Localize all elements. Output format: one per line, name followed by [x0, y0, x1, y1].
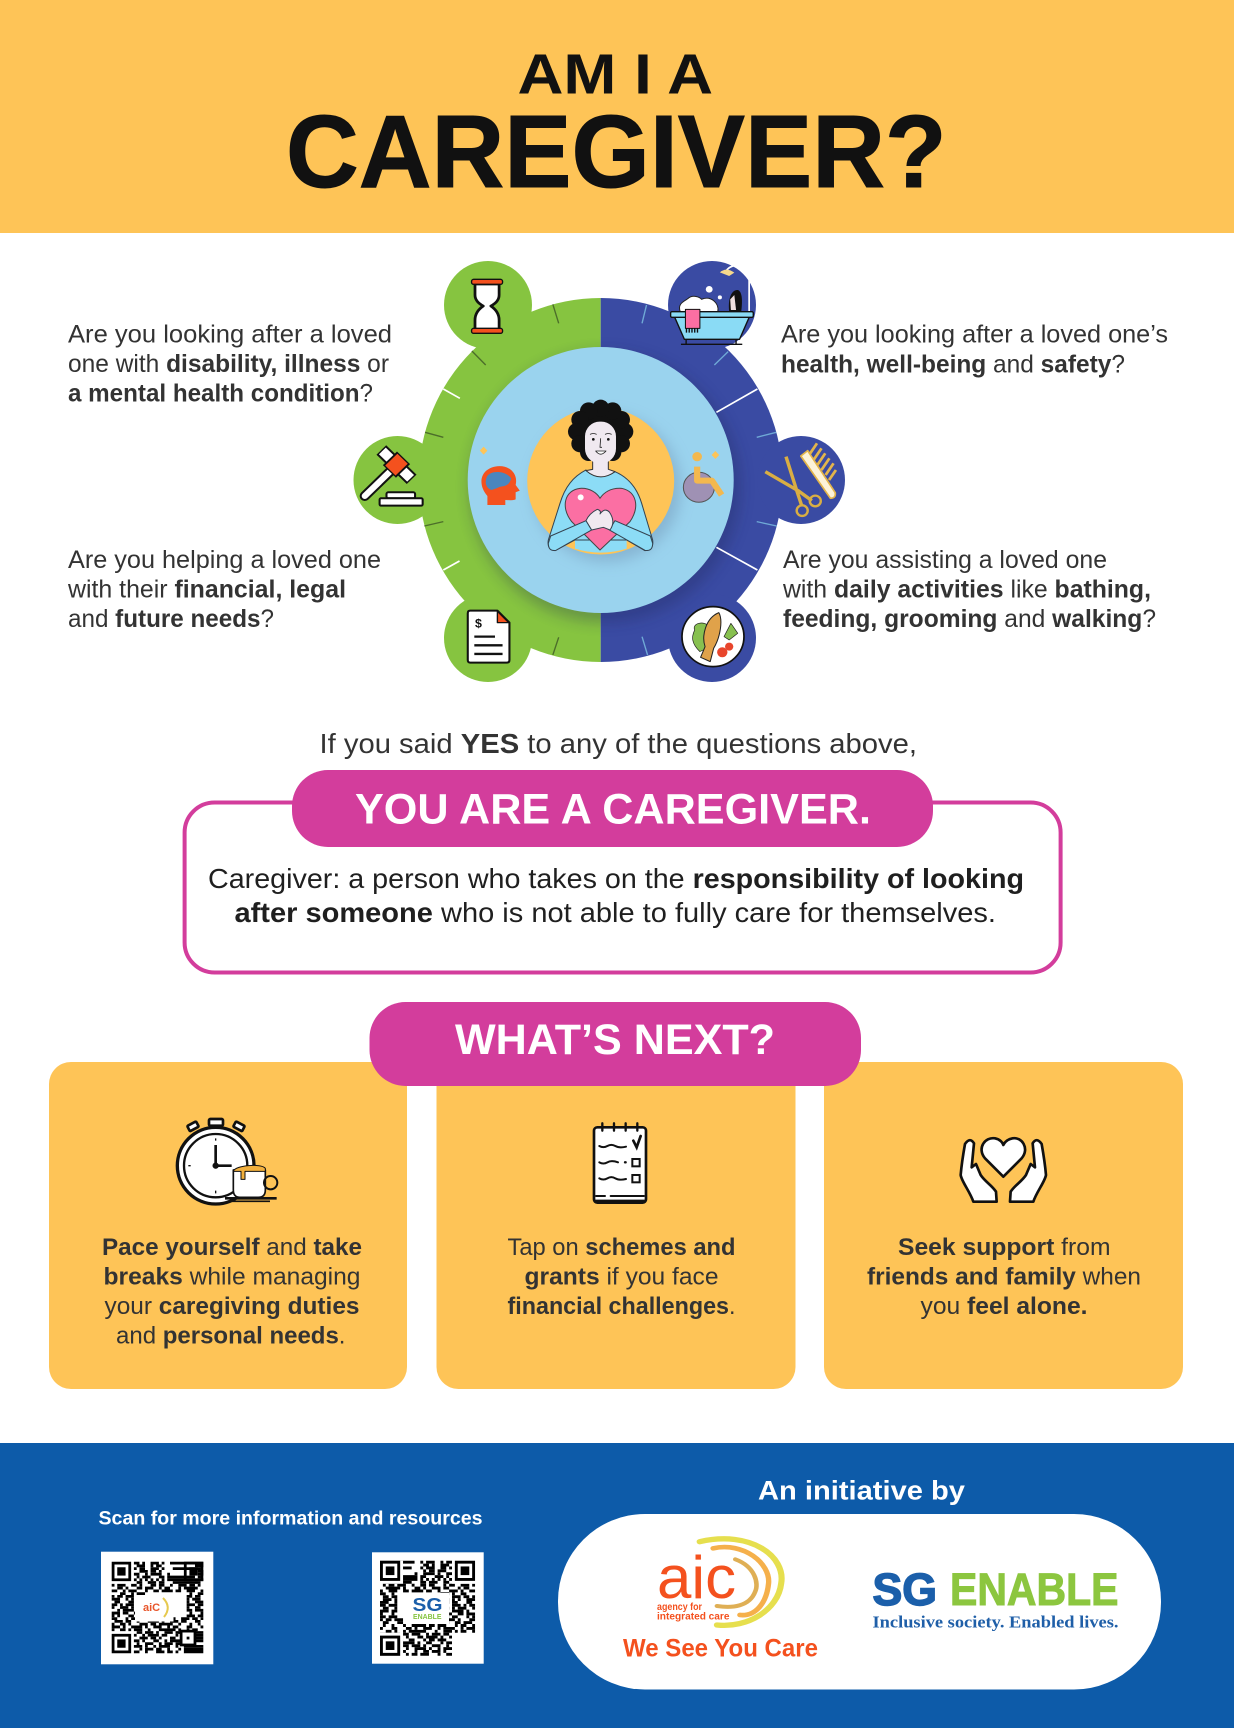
icon: stopwatch and coffee: [177, 1119, 277, 1204]
header band with title: [0, 0, 1234, 233]
tick marks: [424, 304, 777, 655]
card text: friends and family when: [867, 1264, 1141, 1290]
definition text: Caregiver: a person who takes on the responsibility of looking: [208, 863, 1024, 894]
icon: scissors and comb: [765, 443, 836, 516]
logo panel: [558, 1514, 1161, 1690]
logo: AIC: We See You Care: [623, 1634, 818, 1662]
card text: [867, 1234, 1141, 1320]
card: seek support: [824, 1062, 1183, 1389]
pill heading: [292, 770, 933, 847]
question: daily activities: feeding, grooming and walking?: [783, 605, 1156, 633]
logo: SG Enable: [872, 1564, 1118, 1632]
QR code: SG Enable: [372, 1552, 484, 1664]
inner light blue disc: [468, 347, 734, 613]
card text: Pace yourself and take: [102, 1234, 362, 1261]
icon: sparkle right: [712, 451, 719, 459]
QR code: AIC: aiC: [143, 1602, 160, 1614]
icon: bath tub: [671, 265, 753, 344]
yellow disc: [527, 408, 674, 554]
icon: hourglass: [472, 279, 503, 333]
pill heading: what's next: [370, 1002, 861, 1086]
logo: SG Enable: SG: [872, 1564, 937, 1615]
question: health, well-being and safety: Are you looking after a loved one’s: [781, 320, 1168, 348]
pill heading: what's next: WHAT’S NEXT?: [455, 1016, 775, 1064]
icon: sparkle left: [480, 447, 487, 455]
central care wheel: [354, 261, 845, 682]
card text: Seek support from: [898, 1234, 1110, 1261]
logo: AIC: aic: [657, 1544, 736, 1611]
definition text: [208, 863, 1024, 928]
question: disability, illness or mental health: a mental health condition?: [68, 380, 373, 408]
card text: grants if you face: [524, 1264, 718, 1290]
icon: notebook checklist: [594, 1123, 646, 1203]
icon: gavel: [365, 450, 423, 506]
card text: Tap on schemes and: [508, 1234, 736, 1261]
question: daily activities: [782, 546, 1156, 633]
definition text: after someone who is not able to fully care for themselves.: [234, 897, 996, 928]
figure: caregiver hugging heart: [548, 400, 653, 553]
logo: SG Enable: Inclusive society. Enabled lives.: [872, 1612, 1118, 1632]
logo: AIC: integrated care: [657, 1612, 730, 1622]
card text: breaks while managing: [104, 1264, 360, 1290]
card: schemes and grants: [436, 1062, 796, 1389]
logo: AIC: [623, 1539, 818, 1662]
question: financial, legal and future needs: and future needs?: [68, 605, 274, 633]
question: health, well-being and safety: [781, 320, 1168, 378]
icon: wheelchair: [683, 452, 722, 502]
heading: an initiative by: An initiative by: [758, 1476, 965, 1506]
QR code: SG Enable: ENABLE: [413, 1614, 442, 1621]
card text: [508, 1234, 736, 1320]
question: financial, legal and future needs: Are you helping a loved one: [68, 546, 381, 574]
card: pace yourself: [49, 1062, 407, 1389]
panel: tip cards: [49, 1062, 1183, 1389]
card text: and personal needs.: [116, 1322, 346, 1350]
question: disability, illness or mental health: Are you looking after a loved: [68, 320, 392, 348]
card text: your caregiving duties: [104, 1293, 360, 1320]
card text: [102, 1234, 362, 1350]
question: daily activities: with daily activities like bathing,: [782, 576, 1151, 604]
title line: AM I A: AM I A: [518, 42, 713, 106]
callout: you are a caregiver: [185, 770, 1061, 972]
icon: head with brain: [481, 466, 520, 505]
pill heading: YOU ARE A CAREGIVER.: [355, 786, 871, 834]
icon: bill document: [468, 611, 509, 663]
question: disability, illness or mental health: one with disability, illness or: [68, 350, 389, 378]
icon: plate of food: [682, 607, 744, 667]
question: financial, legal and future needs: [67, 546, 381, 633]
question: daily activities: Are you assisting a loved one: [783, 546, 1107, 574]
question: health, well-being and safety: health, well-being and safety?: [781, 350, 1125, 378]
question: financial, legal and future needs: with their financial, legal: [67, 576, 346, 604]
logo: SG Enable: ENABLE: [950, 1564, 1118, 1615]
QR code: SG Enable: SG: [412, 1595, 442, 1615]
icons placed on the wheel: [365, 265, 836, 667]
wheel ring: navy half: [601, 261, 845, 682]
logo: AIC: agency for: [657, 1602, 702, 1613]
card text: you feel alone.: [920, 1293, 1088, 1320]
QR code: AIC: [101, 1552, 213, 1664]
icon: bill document: $: [475, 617, 482, 631]
icon: hands holding heart: [961, 1138, 1046, 1202]
footer band: [0, 1443, 1234, 1728]
intro sentence: If you said YES to any of the questions above,: [320, 728, 917, 759]
question: disability, illness or mental health: [68, 320, 392, 408]
title line: CAREGIVER?: CAREGIVER?: [286, 94, 946, 209]
wheel ring: green half: [354, 261, 601, 682]
card text: financial challenges.: [508, 1293, 736, 1320]
heading: scan for more information: Scan for more information and resources: [98, 1508, 483, 1530]
